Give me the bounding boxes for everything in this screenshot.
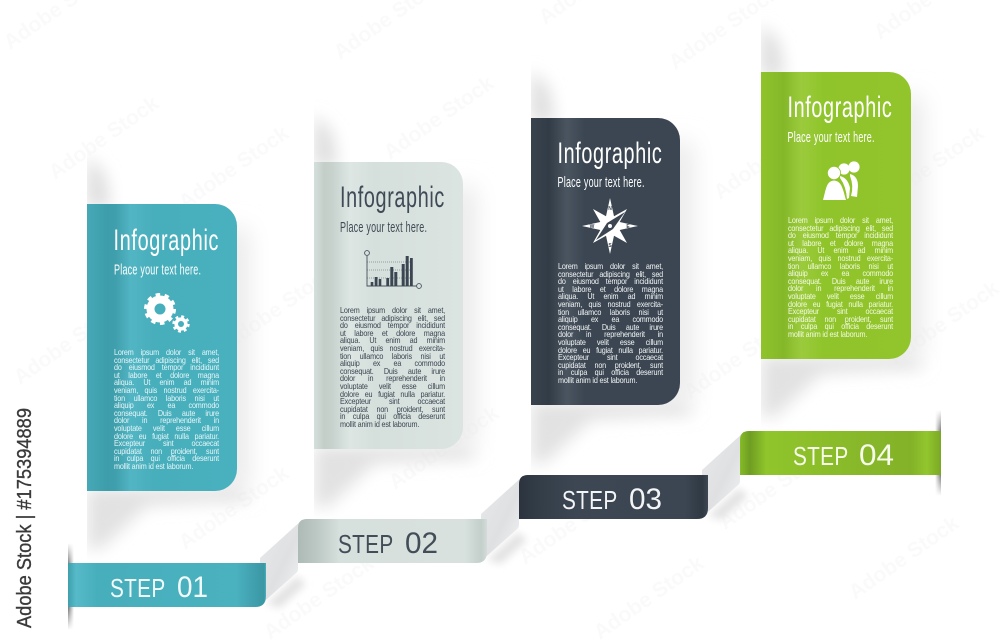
body text: Lorem ipsum dolor sit amet,	[788, 215, 893, 225]
body text: dolor in reprehenderit in	[340, 373, 445, 383]
icon: compass: N	[608, 206, 612, 212]
body text: cupidatat non proident, sunt	[114, 446, 219, 456]
ribbon: step 02: STEP	[338, 530, 393, 559]
icon: people	[823, 161, 860, 200]
body text: dolore eu fugiat nulla pariatur.	[340, 389, 445, 399]
body text: aliqua. Ut enim ad minim	[558, 291, 663, 301]
body text: consectetur adipiscing elit, sed	[340, 313, 445, 323]
ribbon: step 01: 01	[177, 571, 208, 604]
heading: Infographic	[558, 137, 662, 170]
body text: aliqua. Ut enim ad minim	[788, 245, 893, 255]
body text: voluptate velit esse cillum	[558, 337, 663, 347]
body text: mollit anim id est laborum.	[788, 329, 867, 339]
icon: compass: W	[590, 224, 595, 230]
body text: in culpa qui officia deserunt	[340, 411, 445, 421]
subheading: Place your text here.	[788, 129, 875, 146]
watermark: Adobe Stock	[845, 511, 963, 604]
body text: do eiusmod tempor incididunt	[558, 276, 663, 286]
ribbon: step 03: 03	[629, 483, 662, 516]
body text: tion ullamco laboris nisi ut	[788, 261, 893, 271]
body text: do eiusmod tempor incididunt	[788, 230, 893, 240]
body text: aliquip ex ea commodo	[114, 400, 219, 410]
body text: ut labore et dolore magna	[788, 238, 893, 248]
icon: compass: S	[608, 243, 612, 249]
watermark: Adobe Stock	[870, 121, 988, 214]
watermark: Adobe Stock	[220, 261, 338, 354]
heading: Infographic	[340, 181, 445, 214]
body text: dolore eu fugiat nulla pariatur.	[558, 345, 663, 355]
ribbon: step 02	[298, 519, 487, 563]
body text	[114, 347, 220, 471]
icon: bar chart	[365, 251, 421, 288]
body text: aliqua. Ut enim ad minim	[114, 377, 219, 387]
body text: dolor in reprehenderit in	[788, 283, 893, 293]
body text: Lorem ipsum dolor sit amet,	[558, 261, 663, 271]
body text: tion ullamco laboris nisi ut	[114, 393, 219, 403]
body text: tion ullamco laboris nisi ut	[558, 307, 663, 317]
body text: Excepteur sint occaecat	[340, 396, 445, 406]
body text	[340, 305, 446, 429]
body text: consectetur adipiscing elit, sed	[114, 355, 219, 365]
body text: dolor in reprehenderit in	[114, 415, 219, 425]
left end shadow of ribbon	[68, 544, 74, 628]
body text: aliqua. Ut enim ad minim	[340, 335, 445, 345]
body text	[558, 261, 664, 385]
body text: dolor in reprehenderit in	[558, 329, 663, 339]
body text: consequat. Duis aute irure	[788, 276, 893, 286]
body text: ut labore et dolore magna	[114, 370, 219, 380]
heading: Infographic	[788, 91, 892, 124]
body text: consectetur adipiscing elit, sed	[788, 223, 893, 233]
stock credit: Adobe Stock | #175394889	[14, 408, 36, 628]
body text: consequat. Duis aute irure	[114, 408, 219, 418]
body text: cupidatat non proident, sunt	[788, 314, 893, 324]
body text: do eiusmod tempor incididunt	[114, 362, 219, 372]
body text	[788, 215, 894, 339]
body text: veniam, quis nostrud exercita-	[114, 385, 219, 395]
body text: Lorem ipsum dolor sit amet,	[340, 305, 445, 315]
body text: voluptate velit esse cillum	[114, 423, 219, 433]
subheading: Place your text here.	[114, 261, 201, 278]
fold 2 to 3	[479, 476, 527, 564]
body text: mollit anim id est laborum.	[114, 461, 193, 471]
body text: aliquip ex ea commodo	[340, 358, 445, 368]
ribbon: step 04: 04	[859, 439, 894, 472]
panel: step 2 card	[314, 162, 463, 449]
watermark: Adobe Stock	[385, 401, 503, 494]
right end shadow of ribbon	[936, 412, 941, 494]
body text: ut labore et dolore magna	[340, 328, 445, 338]
body text: consequat. Duis aute irure	[558, 322, 663, 332]
watermark: Adobe Stock	[10, 296, 128, 389]
body text: cupidatat non proident, sunt	[558, 360, 663, 370]
body text: aliquip ex ea commodo	[558, 314, 663, 324]
fold 3 to 4	[700, 432, 748, 520]
watermark: Adobe Stock	[45, 91, 163, 184]
body text: cupidatat non proident, sunt	[340, 404, 445, 414]
fold 1 to 2	[258, 520, 306, 608]
body text: do eiusmod tempor incididunt	[340, 320, 445, 330]
heading: Infographic	[114, 224, 219, 257]
body text: mollit anim id est laborum.	[340, 419, 419, 429]
body text: consequat. Duis aute irure	[340, 366, 445, 376]
icon: gears	[146, 295, 188, 331]
body text: aliquip ex ea commodo	[788, 268, 893, 278]
ribbon: step 02: 02	[405, 527, 438, 560]
panel: step 4 card	[761, 72, 911, 359]
body text: tion ullamco laboris nisi ut	[340, 351, 445, 361]
body text: Excepteur sint occaecat	[558, 352, 663, 362]
body text: in culpa qui officia deserunt	[788, 321, 893, 331]
watermark: Adobe Stock	[680, 311, 798, 404]
body text: mollit anim id est laborum.	[558, 375, 637, 385]
watermark: Adobe Stock	[885, 276, 1000, 369]
body text: Excepteur sint occaecat	[114, 438, 219, 448]
subheading: Place your text here.	[558, 174, 645, 191]
ribbon: step 04: STEP	[793, 442, 848, 471]
watermark: Adobe Stock	[715, 441, 833, 534]
panel: step 3 card	[531, 118, 680, 405]
body text: veniam, quis nostrud exercita-	[558, 299, 663, 309]
watermark: Adobe Stock	[380, 71, 498, 164]
watermark: Adobe Stock	[710, 111, 828, 204]
icon: compass	[582, 198, 638, 254]
watermark: Adobe Stock	[515, 476, 633, 569]
icon: compass: E	[626, 224, 630, 230]
card shadow 1	[87, 156, 252, 549]
body text: ut labore et dolore magna	[558, 284, 663, 294]
watermark: Adobe Stock	[175, 121, 293, 214]
watermark: Adobe Stock	[260, 551, 378, 644]
card shadow 4	[761, 24, 926, 417]
body text: Excepteur sint occaecat	[788, 306, 893, 316]
body text: voluptate velit esse cillum	[788, 291, 893, 301]
subheading: Place your text here.	[340, 219, 427, 236]
ribbon: step 01	[68, 563, 266, 607]
body text: dolore eu fugiat nulla pariatur.	[788, 299, 893, 309]
body text: veniam, quis nostrud exercita-	[788, 253, 893, 263]
body text: veniam, quis nostrud exercita-	[340, 343, 445, 353]
watermark: Adobe Stock	[590, 551, 708, 644]
ribbon: step 03	[519, 475, 708, 519]
ribbon: step 03: STEP	[562, 486, 617, 515]
body text: Lorem ipsum dolor sit amet,	[114, 347, 219, 357]
ribbon: step 04	[740, 431, 941, 475]
ribbon: step 01: STEP	[110, 574, 165, 603]
panel: step 1 card	[87, 204, 237, 491]
card shadow 3	[531, 70, 696, 463]
watermark: Adobe Stock	[175, 461, 293, 554]
body text: consectetur adipiscing elit, sed	[558, 269, 663, 279]
body text: in culpa qui officia deserunt	[558, 367, 663, 377]
body text: in culpa qui officia deserunt	[114, 453, 219, 463]
card shadow 2	[314, 114, 479, 507]
body text: dolore eu fugiat nulla pariatur.	[114, 431, 219, 441]
body text: voluptate velit esse cillum	[340, 381, 445, 391]
